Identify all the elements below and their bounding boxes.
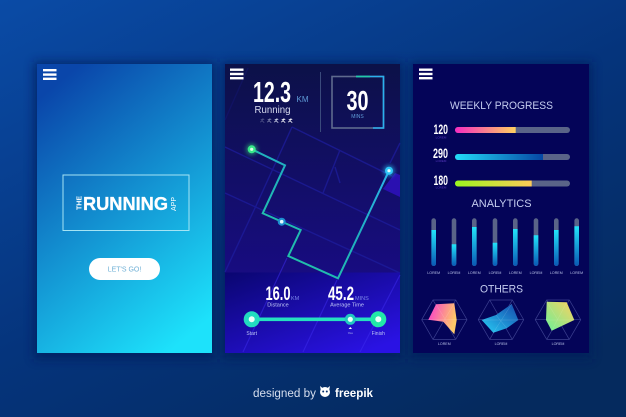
heading: analytics: ANALYTICS (472, 198, 532, 210)
analytics bar chart: LOREM (509, 271, 522, 275)
radar chart 1 (422, 300, 467, 346)
timer box: 30 (346, 85, 368, 116)
icon: runners (260, 118, 292, 122)
logo box: THE (74, 196, 84, 210)
stat: average time: MINS (355, 296, 369, 302)
analytics bar chart: LOREM (570, 271, 583, 275)
stat: running distance (253, 77, 309, 122)
stat: distance: Distance (267, 302, 289, 308)
analytics bar chart: LOREM (448, 271, 460, 275)
analytics bar chart: LOREM (427, 271, 440, 275)
heading: weekly progress: WEEKLY PROGRESS (450, 100, 553, 112)
progress timeline: Start (246, 331, 258, 337)
progress bar 120: 120 (434, 121, 448, 137)
icon: freepik mascot (320, 386, 330, 397)
radar chart 3: LOREM (552, 342, 564, 346)
analytics bar chart: LOREM (530, 271, 542, 275)
radar chart 2 (478, 300, 524, 346)
timer box (332, 76, 384, 128)
logo box: APP (169, 197, 178, 211)
radar chart 3 (535, 300, 581, 346)
progress bar 290: LOREM (436, 159, 447, 163)
progress bar 120: LOREM (436, 136, 447, 140)
divider (320, 72, 321, 132)
stat: running distance: KM (296, 95, 309, 104)
button: let's go (89, 258, 160, 280)
radar chart 1: LOREM (438, 342, 451, 346)
progress timeline (244, 311, 386, 337)
bottom stats panel (225, 258, 400, 353)
progress bar 120 (434, 121, 570, 140)
stat: average time: Average Time (330, 302, 364, 308)
progress bar 180: 180 (434, 172, 448, 188)
map roads (225, 68, 400, 273)
analytics bar chart (427, 218, 583, 275)
radar chart 2: LOREM (495, 342, 507, 346)
credit: freepik: designed by (253, 388, 316, 400)
progress bar 290: 290 (433, 145, 448, 161)
panel: running map (225, 64, 400, 353)
timer box: MINS (351, 114, 364, 120)
stat: average time: 45.2 (328, 283, 354, 305)
icon: menu (419, 68, 432, 79)
panel: splash screen (37, 64, 212, 353)
progress bar 180: LOREM (436, 186, 447, 190)
icon: menu (43, 69, 56, 80)
logo box: RUNNING (83, 194, 168, 214)
icon: menu (230, 68, 244, 79)
analytics bar chart: LOREM (468, 271, 481, 275)
progress bar 180 (434, 172, 570, 190)
progress timeline: Finish (372, 331, 385, 337)
stat: running distance: Running (254, 105, 290, 116)
credit: freepik: freepik (335, 386, 373, 400)
stat: distance: KM (291, 296, 300, 302)
panel: statistics (413, 64, 589, 353)
panel shadows (34, 62, 592, 359)
stat: distance: 16.0 (266, 283, 291, 305)
button: let's go: LET'S GO! (108, 266, 141, 274)
stat: running distance: 12.3 (253, 77, 291, 109)
running route (246, 144, 394, 278)
heading: others: OTHERS (480, 284, 523, 296)
analytics bar chart: LOREM (489, 271, 501, 275)
progress timeline: You (348, 331, 353, 335)
analytics bar chart: LOREM (550, 271, 563, 275)
logo box (63, 175, 189, 230)
progress bar 290 (433, 145, 570, 163)
credit: freepik (253, 386, 373, 400)
